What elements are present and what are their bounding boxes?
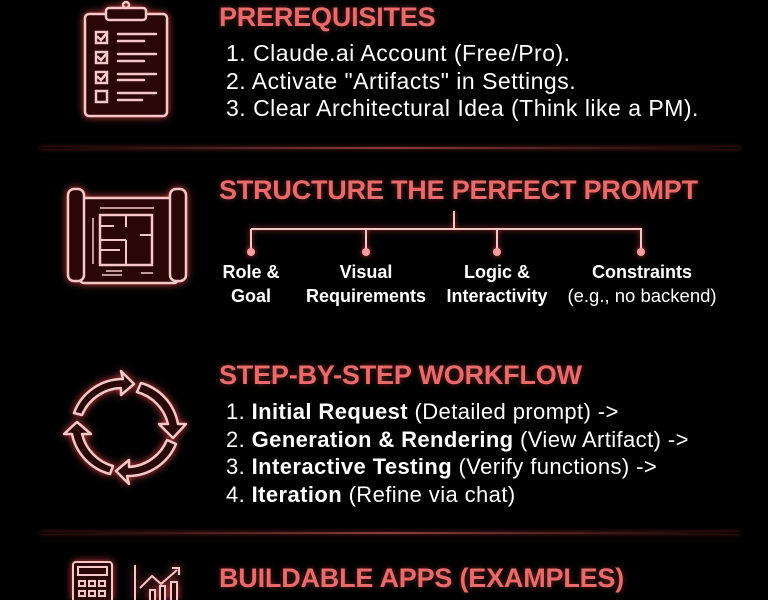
list: workflow steps: 4. Iteration (Refine via chat) bbox=[226, 482, 516, 506]
label: logic & interactivity: Interactivity bbox=[446, 286, 548, 306]
label: visual requirements bbox=[306, 262, 426, 306]
label: role & goal: Goal bbox=[231, 286, 271, 306]
list: prerequisites: 2. Activate "Artifacts" in Settings. bbox=[226, 68, 576, 94]
heading: structure the perfect prompt: STRUCTURE THE PERFECT PROMPT bbox=[219, 175, 698, 205]
heading: prerequisites: PREREQUISITES bbox=[219, 2, 435, 32]
list: prerequisites: 3. Clear Architectural Idea (Think like a PM). bbox=[226, 95, 699, 121]
label: logic & interactivity bbox=[446, 262, 548, 306]
heading: buildable apps: BUILDABLE APPS (EXAMPLES) bbox=[219, 563, 624, 593]
list: prerequisites: 1. Claude.ai Account (Free/Pro). bbox=[226, 40, 571, 66]
list: workflow steps: 3. Interactive Testing (Verify functions) -> bbox=[226, 454, 657, 479]
list: workflow steps bbox=[226, 399, 689, 506]
list: prerequisites bbox=[226, 40, 699, 121]
label: logic & interactivity: Logic & bbox=[464, 262, 530, 282]
icon: calculator and chart bbox=[73, 562, 179, 600]
label: constraints bbox=[567, 262, 717, 306]
label: constraints: (e.g., no backend) bbox=[567, 285, 717, 306]
label: role & goal bbox=[222, 262, 280, 306]
label: constraints: Constraints bbox=[592, 262, 692, 282]
label: role & goal: Role & bbox=[222, 262, 280, 282]
icon: blueprint bbox=[68, 189, 186, 283]
list: workflow steps: 1. Initial Request (Detailed prompt) -> bbox=[226, 399, 619, 424]
heading: workflow: STEP-BY-STEP WORKFLOW bbox=[219, 360, 582, 390]
list: workflow steps: 2. Generation & Rendering (View Artifact) -> bbox=[226, 426, 689, 452]
icon: cycle arrows bbox=[64, 371, 186, 484]
label: visual requirements: Visual bbox=[340, 262, 392, 282]
label: visual requirements: Requirements bbox=[306, 286, 426, 306]
